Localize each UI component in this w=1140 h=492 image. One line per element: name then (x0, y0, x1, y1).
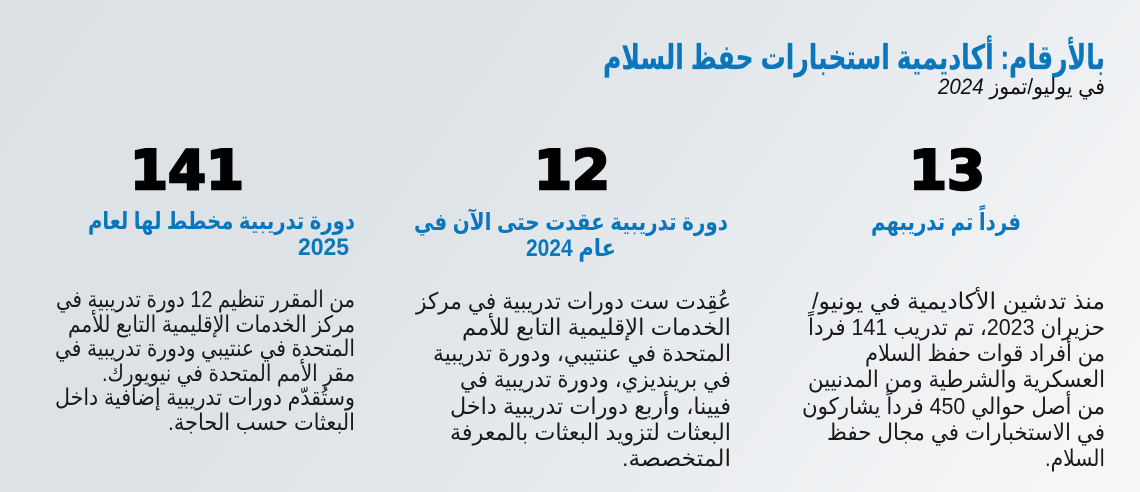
panel: individuals trained (802, 139, 1105, 472)
panel: courses held in 2024 (414, 139, 731, 471)
text block: courses held in 2024: البعثات لتزويد البعثات بالمعرفة (450, 419, 731, 446)
text block: individuals trained: منذ تدشين الأكاديمية في يونيو/ (812, 287, 1105, 315)
text block: courses planned for 2025: مقر الأمم المتحدة في نيويورك. (102, 359, 355, 387)
heading: courses planned for 2025: دورة تدريبية مخطط لها لعام (88, 208, 355, 235)
text block: individuals trained: حزيران 2023، تم تدريب 141 فرداً (807, 311, 1105, 341)
text block: courses held in 2024: المتخصصة. (622, 445, 731, 471)
subtitle: في يوليو/تموز 2024 (937, 74, 1105, 100)
text block: individuals trained: العسكرية والشرطية ومن المدنيين (808, 366, 1105, 393)
heading: courses planned for 2025: 2025 (298, 234, 349, 261)
text block: courses held in 2024: عُقِدت ست دورات تدريبية في مركز (415, 288, 731, 315)
text block: courses held in 2024: الخدمات الإقليمية التابع للأمم (462, 313, 731, 341)
number: 13: 13 (909, 139, 985, 202)
number: 12: 12 (534, 139, 610, 202)
text block: individuals trained: السلام. (1045, 445, 1105, 472)
text block: courses planned for 2025: من المقرر تنظيم 12 دورة تدريبية في (56, 286, 355, 313)
text block: courses planned for 2025: مركز الخدمات الإقليمية التابع للأمم (68, 310, 355, 338)
heading: courses held in 2024: دورة تدريبية عقدت حتى الآن في (414, 208, 728, 236)
text block: courses held in 2024: في برينديزي، ودورة تدريبية في (460, 366, 731, 393)
text block: courses held in 2024: المتحدة في عنتيبي، ودورة تدريبية (433, 340, 731, 367)
text block: courses held in 2024 (415, 288, 731, 471)
heading: courses held in 2024 (414, 208, 728, 262)
text block: individuals trained: من أفراد قوات حفظ السلام (865, 338, 1105, 367)
heading: courses held in 2024: عام 2024 (526, 235, 616, 262)
text block: courses planned for 2025: وستُقدّم دورات تدريبية إضافية داخل (55, 384, 355, 411)
text block: courses planned for 2025: البعثات حسب الحاجة. (168, 409, 355, 435)
panel: courses planned for 2025 (55, 139, 355, 435)
text block: courses held in 2024: فيينا، وأربع دورات تدريبية داخل (450, 391, 731, 420)
text block: individuals trained: من أصل حوالي 450 فرداً يشاركون (802, 390, 1105, 420)
text block: courses planned for 2025 (55, 286, 355, 435)
heading: courses planned for 2025 (88, 208, 355, 261)
heading: individuals trained: فرداً تم تدريبهم (871, 205, 1021, 236)
text block: individuals trained (802, 287, 1105, 472)
text block: courses planned for 2025: المتحدة في عنتيبي ودورة تدريبية في (55, 335, 355, 362)
text block: individuals trained: في الاستخبارات في مجال حفظ (827, 419, 1105, 446)
number: 141: 141 (130, 139, 244, 202)
